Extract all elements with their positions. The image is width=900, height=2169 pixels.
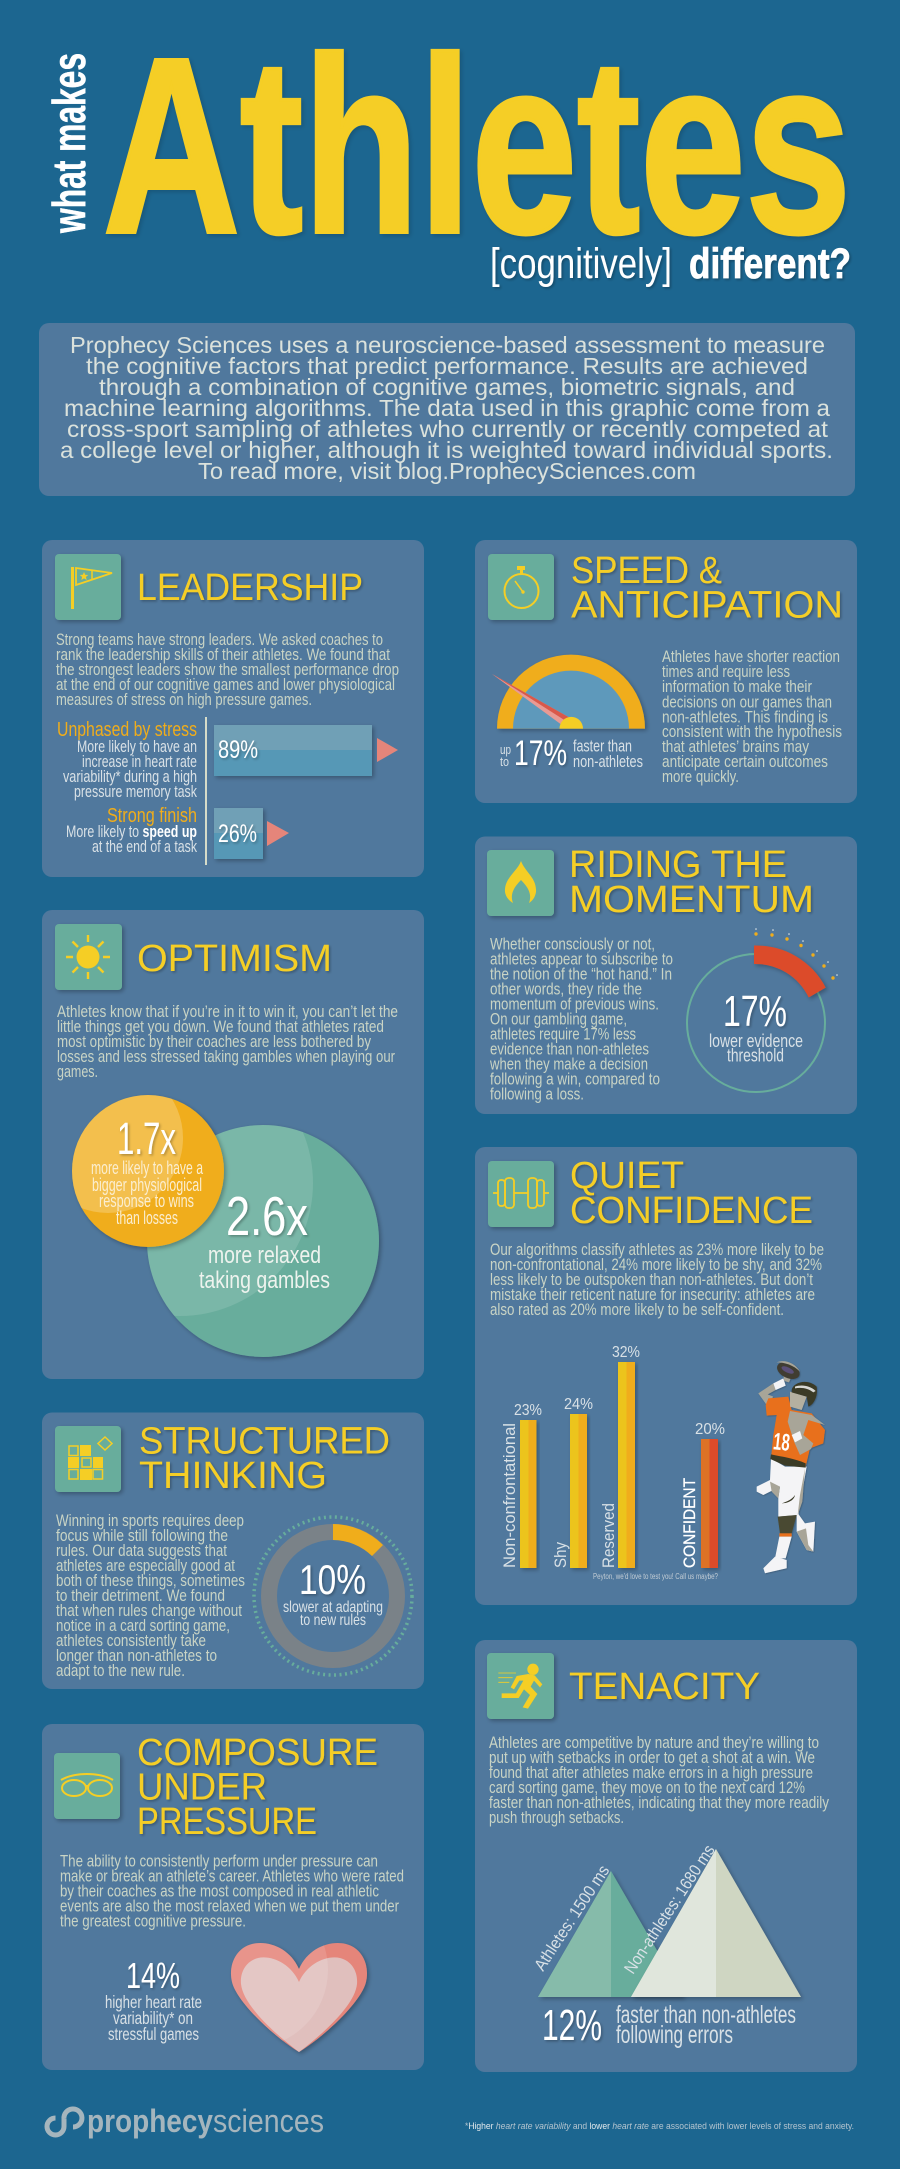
body text: losses and less stressed taking gambles when playing our: [57, 1048, 395, 1066]
heading: [137, 1732, 378, 1843]
body text: The ability to consistently perform under pressure can: [60, 1852, 378, 1870]
body text: most optimistic by their coaches are less bothered by: [57, 1033, 372, 1051]
heading: [571, 550, 843, 626]
panel: tenacity: [475, 1640, 857, 2072]
body text: games.: [57, 1063, 98, 1081]
icon: flame: [487, 850, 554, 916]
circle: 1.7x response: more likely to have a: [91, 1158, 204, 1178]
intro text: [60, 332, 833, 484]
panel: optimism: [33, 910, 424, 1379]
body text: when they make a decision: [489, 1056, 648, 1074]
stat labels: Strong finish: [107, 805, 197, 827]
icon: pennant flag: [55, 554, 121, 620]
stat labels: More likely to speed up: [66, 823, 197, 841]
body text: little things get you down. We found that athletes rated: [57, 1018, 384, 1036]
title block: [43, 6, 851, 288]
heading: SPEED &: [571, 550, 722, 592]
stat labels: [57, 719, 198, 856]
caption: Peyton, we’d love to test you! Call us maybe?: [593, 1572, 718, 1581]
body text: Winning in sports requires deep: [56, 1512, 244, 1530]
stat labels: Unphased by stress: [57, 719, 197, 741]
wordmark: sciences: [213, 2103, 324, 2139]
stat: 17% faster: to: [500, 754, 509, 769]
heading: THINKING: [139, 1455, 327, 1497]
body text: [489, 936, 673, 1104]
stat: 12%: faster than non-athletes: [616, 2001, 796, 2029]
stat: 14%: [105, 1955, 202, 2044]
heading: COMPOSURE: [137, 1732, 378, 1774]
stat: 14%: variability* on: [113, 2008, 193, 2028]
ring chart: 17%: [687, 928, 838, 1092]
body text: events are also the most relaxed when we put them under: [60, 1898, 399, 1916]
icon: card grid: [55, 1426, 121, 1492]
bar: non-confrontational: [500, 1402, 542, 1568]
stat: 12%: [542, 2001, 796, 2050]
body text: rank the leadership skills of their athletes. We found that: [56, 646, 390, 664]
bar: shy: Shy: [551, 1542, 570, 1568]
bar: 26%: [214, 808, 289, 859]
body text: card sorting game, they move on to the next card 12%: [489, 1779, 805, 1797]
footer logo: [47, 2103, 324, 2139]
intro text: cross-sport sampling of athletes who currently or recently competed at: [67, 416, 829, 442]
intro text: Prophecy Sciences uses a neuroscience-based assessment to measure: [70, 332, 825, 358]
heading: TENACITY: [569, 1666, 760, 1708]
body text: athletes consistently take: [56, 1632, 206, 1650]
intro text: the cognitive factors that predict performance. Results are achieved: [86, 353, 808, 379]
circle: 1.7x response: than losses: [116, 1208, 178, 1228]
stat labels: increase in heart rate: [82, 753, 197, 771]
circle: 2.6x relaxed: more relaxed: [208, 1242, 321, 1269]
body text: to their detriment. We found: [56, 1587, 225, 1605]
body text: [490, 1241, 824, 1319]
donut chart: 10%: slower at adapting: [283, 1599, 383, 1616]
stat labels: pressure memory task: [74, 783, 198, 801]
bar: 89%: [214, 725, 398, 776]
intro text: a college level or higher, although it is weighted toward individual sports.: [60, 437, 833, 463]
bar: reserved: [599, 1344, 640, 1568]
stat: 12%: following errors: [616, 2021, 733, 2049]
gauge: [492, 655, 645, 729]
bar: non-confrontational: Non-confrontational: [500, 1423, 519, 1568]
panel: intro: [39, 323, 855, 496]
body text: On our gambling game,: [490, 1010, 627, 1028]
panel: composure under pressure: [42, 1724, 424, 2070]
body text: rules. Our data suggests that: [56, 1542, 227, 1560]
bar chart: [500, 1344, 725, 1568]
circle: 1.7x response: 1.7x: [117, 1113, 176, 1164]
icon: dumbbell: [488, 1161, 554, 1227]
icon: stopwatch: [488, 554, 554, 620]
stat: 17% faster: [500, 734, 643, 773]
body text: decisions on our games than: [662, 694, 832, 712]
donut chart: 10%: [254, 1517, 412, 1675]
intro text: through a combination of cognitive games, biometric signals, and: [99, 374, 795, 400]
body text: [60, 1852, 404, 1930]
icon: runner: [487, 1653, 554, 1719]
icon: heart: [231, 1943, 371, 2055]
body text: athletes require 17% less: [490, 1026, 636, 1044]
stat labels: More likely to have an: [77, 738, 197, 756]
body text: more quickly.: [662, 768, 739, 786]
stat: 14%: 14%: [126, 1955, 180, 1996]
panel: leadership: [42, 540, 424, 877]
stat: 17% faster: faster than: [573, 738, 632, 756]
body text: also rated as 20% more likely to be self-confident.: [490, 1301, 784, 1319]
heading: CONFIDENCE: [570, 1190, 813, 1232]
body text: less likely to be outspoken than non-athletes. But don’t: [490, 1271, 813, 1289]
pyramid: non-athletes: [620, 1841, 801, 1997]
circle: 1.7x response: response to wins: [99, 1191, 194, 1211]
heading: STRUCTURED: [139, 1420, 390, 1462]
bar: confident: [680, 1421, 725, 1568]
pyramid: non-athletes: Non-athletes: 1680 ms: [620, 1841, 719, 1977]
bar: non-confrontational: 23%: [514, 1402, 542, 1419]
body text: found that after athletes make errors in a high pressure: [489, 1764, 813, 1782]
panel: riding the momentum: [475, 836, 857, 1114]
heading: LEADERSHIP: [137, 567, 363, 609]
intro text: To read more, visit blog.ProphecySciences.com: [198, 458, 696, 484]
body text: that when rules change without: [56, 1602, 242, 1620]
body text: adapt to the new rule.: [56, 1662, 185, 1680]
stat: 12%: 12%: [542, 2001, 602, 2050]
body text: following a win, compared to: [490, 1070, 660, 1088]
stat labels: at the end of a task: [92, 838, 198, 856]
stat: 14%: stressful games: [108, 2024, 199, 2044]
body text: times and require less: [662, 663, 790, 681]
bar: shy: 24%: [564, 1396, 593, 1413]
ring chart: 17%: 17%: [723, 987, 787, 1036]
body text: longer than non-athletes to: [56, 1647, 217, 1665]
body text: [56, 1512, 245, 1680]
panel: structured thinking: [42, 1412, 424, 1689]
ring chart: 17%: lower evidence: [709, 1030, 803, 1051]
body text: both of these things, sometimes: [56, 1572, 245, 1590]
donut chart: 10%: 10%: [299, 1556, 366, 1603]
heading: [569, 844, 814, 921]
body text: by their coaches as the most composed in real athletic: [60, 1882, 379, 1900]
subtitle: cognitively: [cognitively]: [490, 240, 672, 288]
body text: Our algorithms classify athletes as 23% more likely to be: [490, 1241, 824, 1259]
panel: quiet confidence: [475, 1147, 857, 1605]
body text: consistent with the hypothesis: [662, 723, 842, 741]
intro text: machine learning algorithms. The data used in this graphic come from a: [64, 395, 830, 421]
stat labels: variability* during a high: [63, 768, 197, 786]
illustration: quarterback: [757, 1359, 825, 1573]
body text: the greatest cognitive pressure.: [60, 1912, 246, 1930]
body text: [662, 648, 842, 786]
illustration: quarterback: 18: [772, 1428, 791, 1457]
subtitle: different: different?: [689, 240, 851, 288]
bar: shy: [551, 1396, 593, 1568]
body text: information to make their: [662, 678, 812, 696]
pyramid: athletes: [530, 1862, 684, 1997]
panel: speed and anticipation: [475, 540, 857, 803]
body text: following a loss.: [490, 1086, 584, 1104]
body text: non-athletes. This finding is: [662, 708, 828, 726]
bar: reserved: 32%: [612, 1344, 640, 1361]
bar: confident: 20%: [695, 1421, 725, 1438]
heading: ANTICIPATION: [571, 584, 843, 626]
stat: 14%: higher heart rate: [105, 1992, 202, 2012]
heading: QUIET: [570, 1155, 684, 1197]
body text: notice in a card sorting game,: [56, 1617, 230, 1635]
body text: Strong teams have strong leaders. We asked coaches to: [56, 631, 383, 649]
heading: RIDING THE: [569, 844, 787, 886]
body text: Whether consciously or not,: [490, 936, 655, 954]
stat: 17% faster: non-athletes: [573, 753, 643, 771]
body text: mistake their reticent nature for insecurity: athletes are: [490, 1286, 815, 1304]
circle: 2.6x relaxed: taking gambles: [199, 1267, 330, 1294]
heading: MOMENTUM: [569, 879, 814, 921]
body text: anticipate certain outcomes: [662, 753, 828, 771]
body text: athletes appear to subscribe to: [490, 950, 673, 968]
footnote: *Higher heart rate variability and lower heart rate are associated with lower levels of stress and anxiety.: [465, 2121, 854, 2132]
circle: 1.7x response: bigger physiological: [92, 1175, 202, 1195]
icon: prophecy mark: [47, 2109, 82, 2135]
body text: push through setbacks.: [489, 1809, 624, 1827]
stat: 17% faster: up: [500, 742, 511, 757]
donut chart: 10%: to new rules: [300, 1612, 366, 1629]
body text: non-confrontational, 24% more likely to be shy, and 32%: [490, 1256, 822, 1274]
circle: 2.6x relaxed: [147, 1125, 383, 1361]
body text: Athletes have shorter reaction: [662, 648, 840, 666]
bar: reserved: Reserved: [599, 1503, 618, 1568]
icon: goggles: [54, 1753, 120, 1819]
body text: the strongest leaders show the smallest performance drop: [56, 661, 399, 679]
pyramid: athletes: Athletes: 1500 ms: [530, 1862, 613, 1974]
body text: [57, 1003, 398, 1081]
ring chart: 17%: threshold: [727, 1044, 784, 1066]
bar: 26%: 26%: [218, 820, 257, 848]
body text: at the end of our cognitive games and lower physiological: [56, 676, 395, 694]
circle: 1.7x response: [72, 1095, 228, 1251]
body text: that athletes’ brains may: [662, 738, 810, 756]
body text: momentum of previous wins.: [490, 996, 659, 1014]
heading: [139, 1420, 390, 1497]
wordmark: prophecy: [87, 2103, 213, 2139]
circle: 2.6x relaxed: 2.6x: [226, 1185, 308, 1247]
body text: other words, they ride the: [490, 980, 642, 998]
body text: [489, 1734, 830, 1827]
body text: athletes are especially good at: [56, 1557, 235, 1575]
body text: measures of stress on high pressure games.: [56, 691, 312, 709]
stat: 17% faster: 17%: [514, 734, 567, 773]
icon: sun: [55, 924, 122, 990]
heading: OPTIMISM: [137, 938, 332, 980]
body text: Athletes know that if you’re in it to win it, you can’t let the: [57, 1003, 398, 1021]
body text: focus while still following the: [56, 1527, 228, 1545]
body text: make or break an athlete’s career. Athletes who were rated: [60, 1868, 404, 1886]
body text: put up with setbacks in order to get a shot at a win. We: [489, 1749, 815, 1767]
bar: confident: CONFIDENT: [680, 1478, 699, 1568]
heading: [570, 1155, 813, 1232]
body text: evidence than non-athletes: [490, 1040, 649, 1058]
body text: [56, 631, 399, 709]
body text: Athletes are competitive by nature and they’re willing to: [489, 1734, 819, 1752]
heading: PRESSURE: [137, 1801, 317, 1843]
bar: 89%: 89%: [218, 736, 258, 764]
body text: the notion of the “hot hand.” In: [490, 966, 672, 984]
heading: UNDER: [137, 1766, 267, 1808]
body text: faster than non-athletes, indicating that they more readily: [489, 1794, 830, 1812]
